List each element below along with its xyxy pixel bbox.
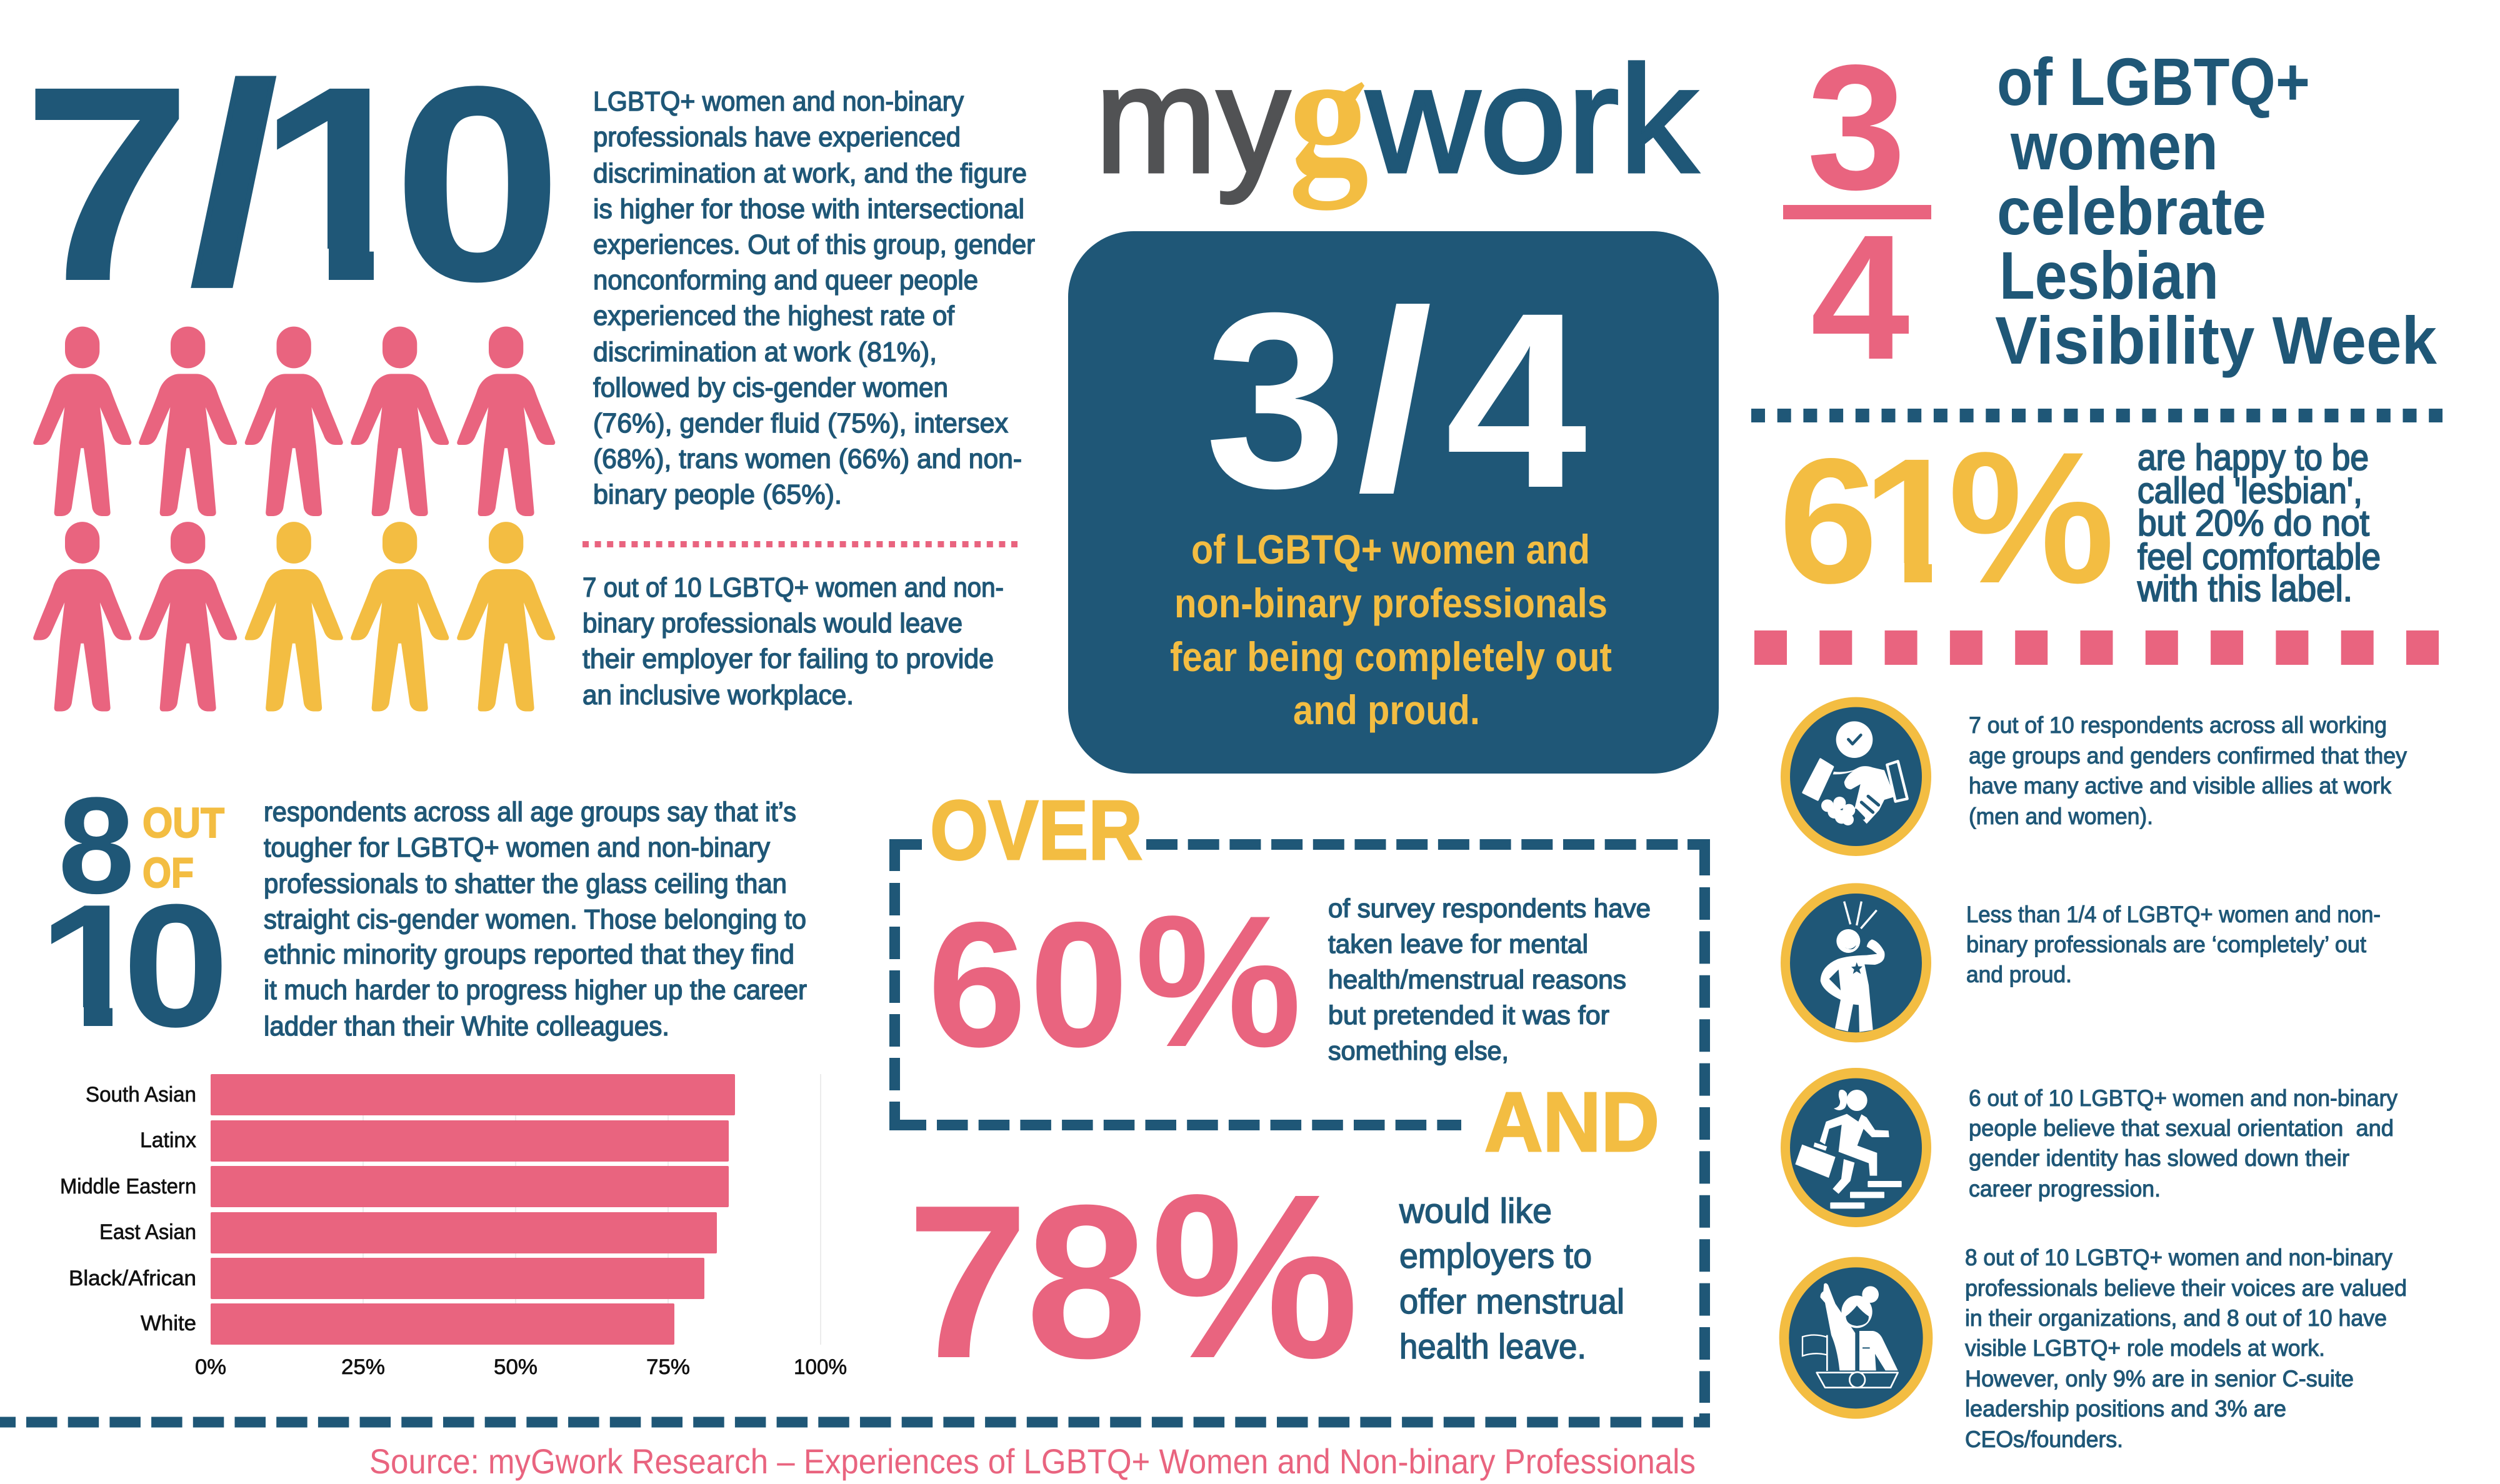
- chart axis labels: 25%: [341, 1355, 385, 1379]
- text block: taken leave: something else,: [1328, 1036, 1509, 1065]
- text block: taken leave: of survey respondents have: [1328, 894, 1651, 923]
- big stat: 8 out of 10: OF: [142, 849, 194, 897]
- text: allies at work: age groups and genders confirmed that they: [1969, 743, 2407, 769]
- text: slowed career progression: people believe that sexual orientation and: [1969, 1115, 2394, 1141]
- chart category labels: [60, 1083, 196, 1335]
- big stat: 8 out of 10: 0: [122, 869, 229, 1063]
- text block: would leave employer: binary professionals would leave: [582, 608, 962, 639]
- text block: discrimination at work: professionals have experienced: [593, 122, 961, 152]
- chart category labels: South Asian: [86, 1083, 196, 1107]
- big stat: 61%: %: [1948, 412, 2115, 622]
- text block: happy to be called lesbian: feel comfortable: [2138, 537, 2381, 577]
- text: completely out and proud: binary professionals are ‘completely’ out: [1966, 932, 2367, 957]
- text: allies at work: have many active and visible allies at work: [1969, 773, 2391, 799]
- big stat: 7/10: 1: [256, 29, 426, 339]
- big stat: 60%: 60%: [928, 876, 1302, 1086]
- text block: glass ceiling: professionals to shatter the glass ceiling than: [264, 869, 787, 899]
- text block: taken leave: [1328, 894, 1651, 1065]
- text block: happy to be called lesbian: with this label.: [2137, 569, 2352, 609]
- big stat: 3/4: 3/4: [1205, 261, 1589, 540]
- text block: would leave employer: [582, 572, 1004, 710]
- text block: discrimination at work: discrimination at work, and the figure: [593, 158, 1027, 189]
- chart axis labels: 0%: [195, 1355, 226, 1379]
- big stat: 7/10: [35, 76, 550, 288]
- text: allies at work: 7 out of 10 respondents across all working: [1969, 712, 2387, 738]
- text block: discrimination at work: discrimination at work (81%),: [593, 337, 937, 367]
- text block: would leave employer: their employer for failing to provide: [582, 644, 994, 674]
- text block: would leave employer: an inclusive workplace.: [582, 680, 854, 710]
- chart axis labels: 50%: [494, 1355, 538, 1379]
- fraction: 3 over 4: 3: [1807, 28, 1906, 227]
- panel text: non-binary professionals: [1174, 580, 1608, 626]
- text: voices valued and role models: leadership positions and 3% are: [1965, 1396, 2286, 1422]
- text block: taken leave: taken leave for mental: [1328, 929, 1588, 959]
- panel text: of LGBTQ+ women and: [1191, 526, 1590, 572]
- icon: proud person with star: [1781, 883, 1931, 1042]
- icon: woman speaking at podium: [1779, 1257, 1932, 1419]
- panel text: and proud.: [1293, 687, 1480, 733]
- text block: discrimination at work: experiences. Out of this group, gender: [593, 229, 1035, 260]
- label: OVER: OVER: [930, 783, 1142, 877]
- fraction: 3 over 4: [1783, 28, 1931, 397]
- icon: woman climbing stairs: [1781, 1068, 1931, 1227]
- big stat: 7/10: 0: [392, 29, 562, 339]
- text: slowed career progression: [1969, 1085, 2398, 1202]
- text block: happy to be called lesbian: called 'lesbian',: [2138, 471, 2362, 511]
- text block: would leave employer: 7 out of 10 LGBTQ+ women and non-: [582, 572, 1004, 603]
- text: allies at work: [1969, 712, 2407, 829]
- heading: Lesbian Visibility Week: Visibility Week: [1995, 302, 2438, 378]
- text block: discrimination at work: binary people (65%).: [593, 479, 842, 510]
- text block: glass ceiling: respondents across all age groups say that it’s: [264, 797, 796, 827]
- panel text: [1170, 526, 1612, 733]
- big stat: 61%: [1785, 452, 2110, 584]
- fraction: 3 over 4: 4: [1811, 198, 1911, 397]
- chart axis labels: [195, 1355, 847, 1379]
- big stat: 61%: 1: [1862, 422, 1962, 620]
- big stat: 78%: 78%: [907, 1146, 1359, 1407]
- text block: glass ceiling: it much harder to progress higher up the career: [264, 975, 807, 1005]
- text: slowed career progression: gender identity has slowed down their: [1969, 1145, 2349, 1171]
- text: voices valued and role models: CEOs/founders.: [1965, 1427, 2123, 1452]
- big stat: 8 out of 10: [51, 797, 225, 1028]
- logo: mygwork: my: [1095, 35, 1290, 204]
- text block: glass ceiling: straight cis-gender women. Those belonging to: [264, 904, 806, 935]
- big stat: 61%: 6: [1779, 422, 1878, 620]
- chart category labels: Latinx: [140, 1128, 196, 1152]
- text block: menstrual health leave: health leave.: [1399, 1327, 1586, 1366]
- text block: glass ceiling: ladder than their White colleagues.: [264, 1011, 669, 1042]
- text: voices valued and role models: However, only 9% are in senior C-suite: [1965, 1366, 2354, 1392]
- text: completely out and proud: [1966, 902, 2381, 987]
- text block: menstrual health leave: offer menstrual: [1399, 1282, 1624, 1321]
- text: slowed career progression: 6 out of 10 LGBTQ+ women and non-binary: [1969, 1085, 2398, 1111]
- chart axis labels: 100%: [794, 1355, 847, 1379]
- heading: Lesbian Visibility Week: celebrate: [1997, 173, 2266, 249]
- panel text: fear being completely out: [1170, 634, 1612, 680]
- bar chart: ethnic groups: [60, 1074, 847, 1379]
- text block: discrimination at work: is higher for those with intersectional: [593, 194, 1024, 224]
- label: AND: AND: [1484, 1075, 1659, 1169]
- text: voices valued and role models: [1965, 1245, 2407, 1452]
- heading: Lesbian Visibility Week: women: [2010, 108, 2218, 184]
- chart category labels: East Asian: [99, 1220, 196, 1244]
- text block: taken leave: health/menstrual reasons: [1328, 965, 1626, 994]
- text block: glass ceiling: tougher for LGBTQ+ women and non-binary: [264, 832, 770, 863]
- text block: discrimination at work: LGBTQ+ women and non-binary: [593, 86, 964, 117]
- text block: menstrual health leave: employers to: [1399, 1236, 1592, 1275]
- text: completely out and proud: Less than 1/4 of LGBTQ+ women and non-: [1966, 902, 2381, 927]
- text block: discrimination at work: nonconforming and queer people: [593, 265, 978, 296]
- chart category labels: Middle Eastern: [60, 1175, 196, 1198]
- panel: 3/4 fear being out: [1068, 231, 1719, 774]
- text block: happy to be called lesbian: but 20% do not: [2138, 503, 2369, 544]
- heading: Lesbian Visibility Week: [1995, 44, 2438, 378]
- chart axis labels: 75%: [646, 1355, 690, 1379]
- text block: menstrual health leave: would like: [1399, 1191, 1552, 1230]
- text block: discrimination at work: experienced the highest rate of: [593, 301, 955, 331]
- chart category labels: Black/African: [69, 1267, 196, 1290]
- heading: Lesbian Visibility Week: of LGBTQ+: [1997, 44, 2310, 119]
- text: completely out and proud: and proud.: [1966, 962, 2072, 987]
- text block: discrimination at work: [593, 86, 1035, 510]
- text: voices valued and role models: visible LGBTQ+ role models at work.: [1965, 1335, 2325, 1361]
- text: voices valued and role models: in their organizations, and 8 out of 10 have: [1965, 1305, 2387, 1331]
- text block: discrimination at work: (68%), trans women (66%) and non-: [593, 444, 1022, 474]
- text: voices valued and role models: professionals believe their voices are valued: [1965, 1275, 2407, 1301]
- big stat: 8 out of 10: 8: [58, 769, 134, 922]
- text block: discrimination at work: (76%), gender fluid (75%), intersex: [593, 408, 1008, 439]
- logo: mygwork: g: [1289, 16, 1369, 213]
- chart category labels: White: [141, 1312, 196, 1335]
- big stat: 8 out of 10: OUT: [142, 799, 224, 847]
- big stat: 7/10: 7/: [22, 29, 277, 339]
- text block: glass ceiling: ethnic minority groups reported that they find: [264, 939, 794, 970]
- big stat: 8 out of 10: 1: [38, 869, 145, 1063]
- text block: menstrual health leave: [1399, 1191, 1624, 1366]
- text block: glass ceiling: [264, 797, 807, 1042]
- logo: mygwork: work: [1366, 35, 1698, 204]
- pictogram: ten people, seven pink and three yellow: [33, 327, 555, 711]
- text: allies at work: (men and women).: [1969, 804, 2153, 829]
- icon: handshake with check: [1781, 697, 1931, 856]
- text: slowed career progression: career progression.: [1969, 1176, 2161, 1202]
- text block: happy to be called lesbian: are happy to be: [2138, 437, 2369, 478]
- text: voices valued and role models: 8 out of 10 LGBTQ+ women and non-binary: [1965, 1245, 2392, 1270]
- text block: taken leave: but pretended it was for: [1328, 1000, 1609, 1030]
- heading: Lesbian Visibility Week: Lesbian: [1999, 237, 2219, 313]
- text block: happy to be called lesbian: [2137, 437, 2381, 609]
- text block: discrimination at work: followed by cis-gender women: [593, 372, 948, 403]
- source line: Source: myGwork Research – Experiences of LGBTQ+ Women and Non-binary Professionals: [369, 1442, 1696, 1481]
- logo: mygwork: [1095, 16, 1698, 213]
